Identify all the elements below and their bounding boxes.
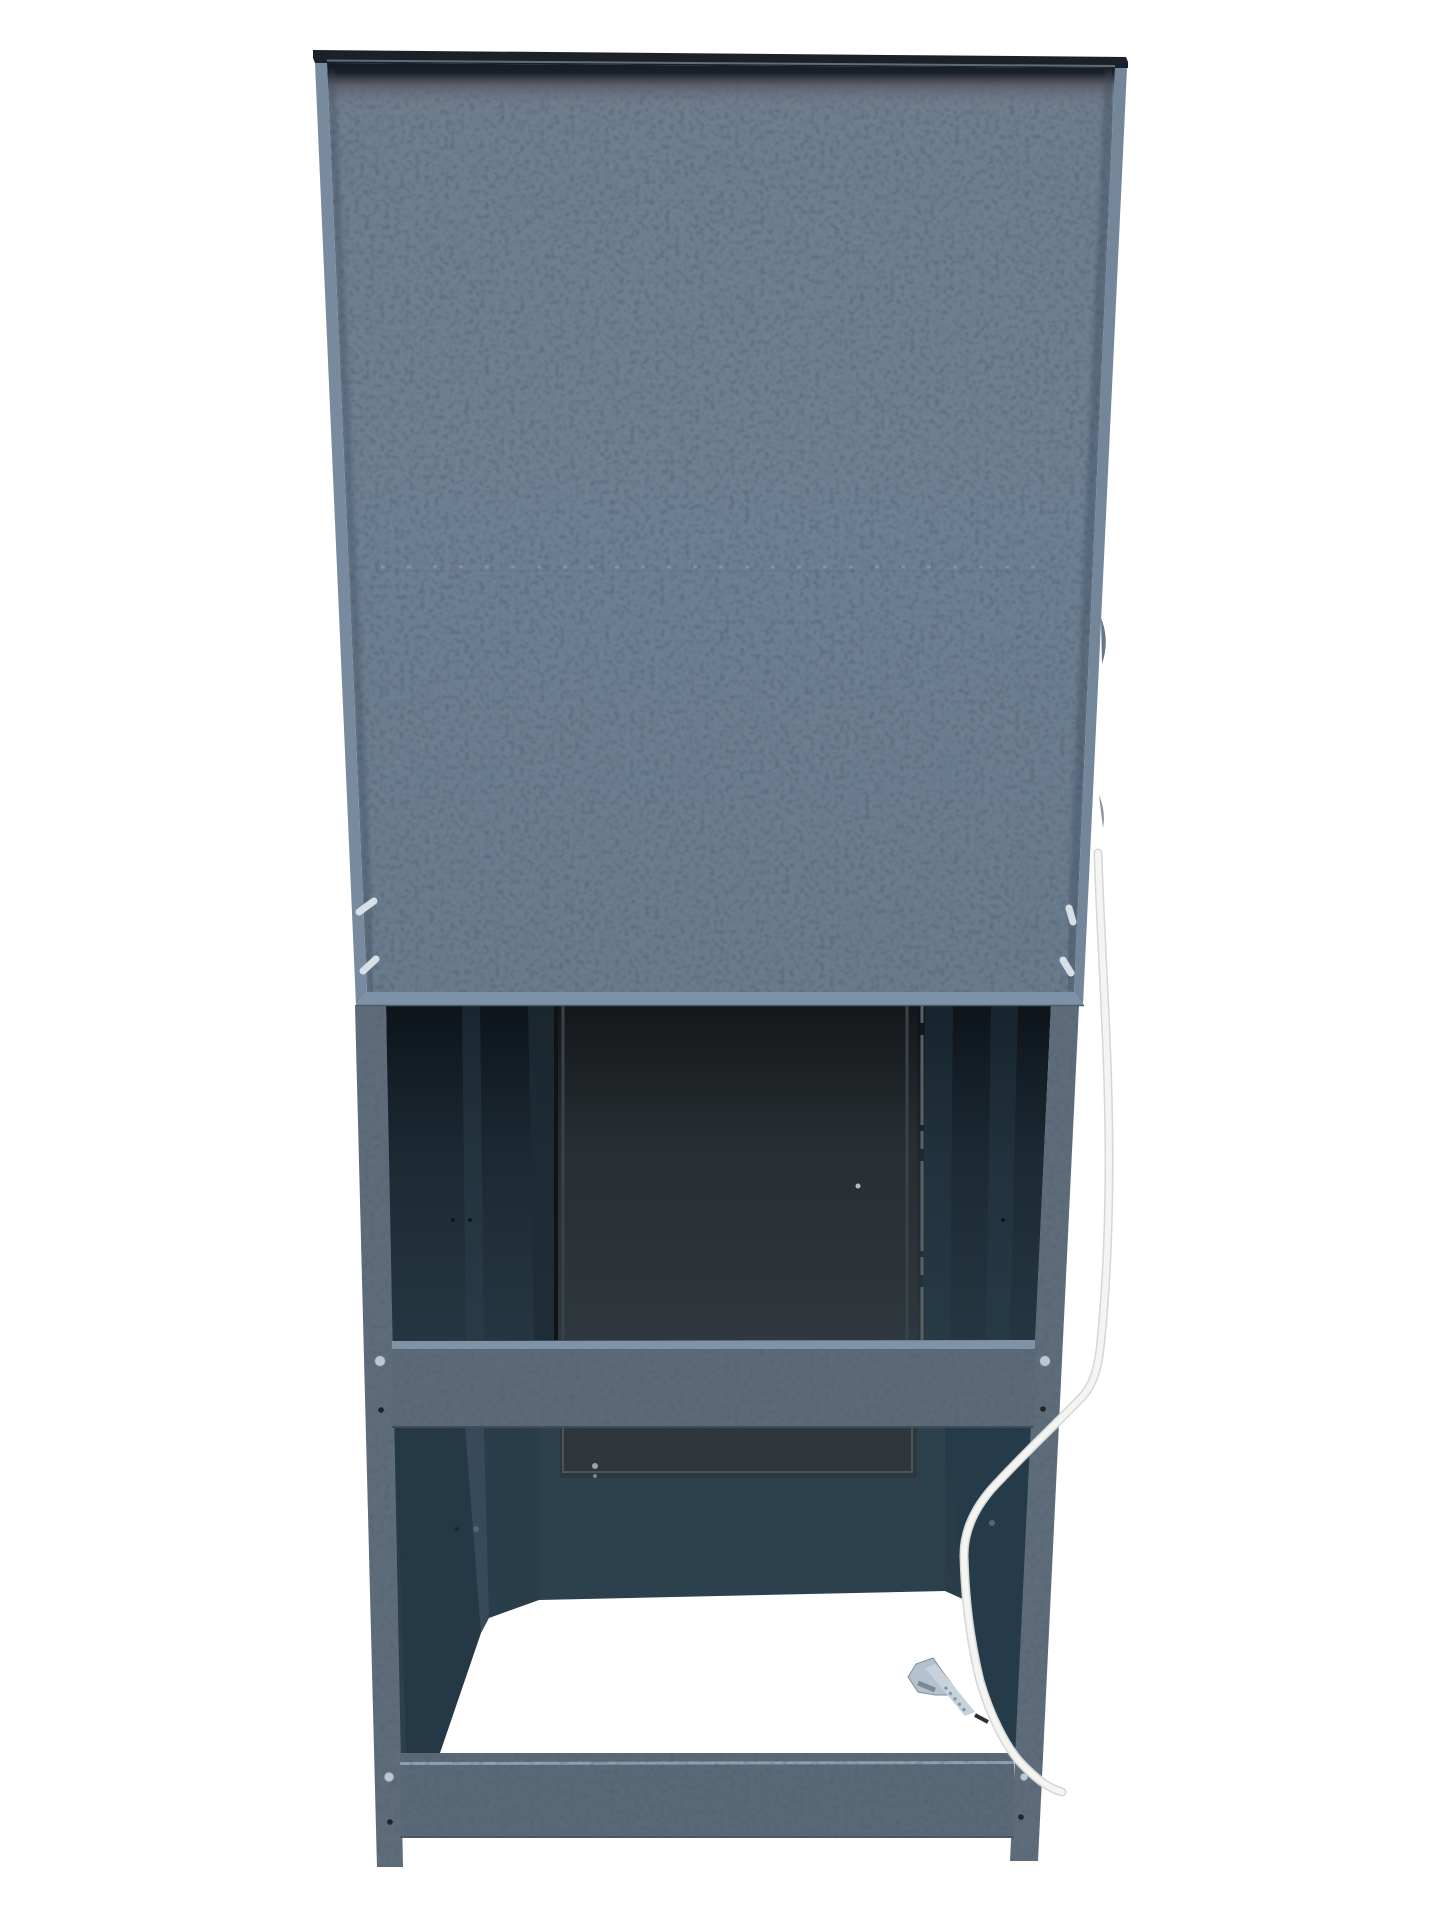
upper panel — [313, 50, 1128, 1006]
edge shadows — [331, 70, 371, 992]
lower cabinet interior — [386, 1005, 1051, 1753]
stud: upper left — [359, 901, 374, 912]
left channel shading — [462, 1005, 484, 1340]
bottom lip — [356, 992, 1084, 1005]
rear door panel in the interior — [451, 1005, 1005, 1532]
right flange — [1074, 68, 1127, 1005]
lower crossbar — [400, 1753, 1014, 1837]
stud: lower right — [1063, 960, 1071, 973]
rivets — [856, 1184, 860, 1188]
white floor opening — [440, 1591, 1012, 1753]
stud: lower left — [363, 959, 376, 971]
top shadow — [327, 63, 1115, 98]
dark top rail — [313, 50, 1128, 68]
dent line — [381, 566, 1047, 568]
frame screws and holes — [374, 1356, 1050, 1825]
lower rear wall — [540, 1427, 945, 1600]
stud: upper right — [1069, 908, 1073, 922]
main face — [327, 63, 1115, 992]
right channel shading — [922, 1005, 953, 1340]
lower left wall — [396, 1427, 481, 1753]
cable slivers behind upper panel — [1099, 618, 1106, 828]
cabinet side posts — [350, 1005, 1085, 1870]
product photo: metal cabinet rear view — [313, 50, 1128, 1867]
left flange — [315, 63, 367, 1005]
white power cable — [964, 853, 1109, 1792]
upper crossbar — [392, 1340, 1035, 1427]
power plug — [908, 1658, 988, 1722]
